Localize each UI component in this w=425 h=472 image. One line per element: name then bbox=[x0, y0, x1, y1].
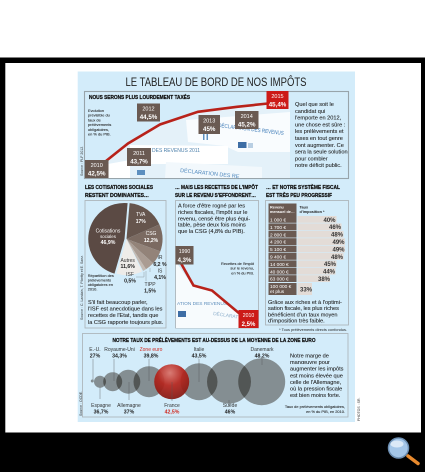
icon: magnifying glass bbox=[388, 438, 418, 464]
panel: pie chart: IS bbox=[158, 268, 163, 274]
row: 1 700 euros: 46% bbox=[329, 225, 342, 231]
text: pie caption: 2010. bbox=[88, 286, 97, 292]
row: 40 000 euros: 40 000 € bbox=[270, 269, 289, 275]
text: income tax paragraph: riches fiscales, l'impôt sur le bbox=[178, 210, 247, 216]
text: pie caption: Répartition des bbox=[88, 273, 114, 278]
data point: 2012: 2012 bbox=[142, 106, 155, 112]
pie labels: TVA bbox=[136, 212, 146, 218]
panel: euro zone bubble chart bbox=[82, 334, 348, 417]
leader lines bbox=[136, 263, 159, 281]
text: intro paragraph: taxes en tout genre bbox=[295, 136, 343, 142]
text: chart description: obligatoires, bbox=[88, 127, 109, 132]
data point: 1990: 1990 bbox=[179, 249, 190, 255]
panel: pie chart: 11,6% bbox=[120, 264, 135, 270]
row: 5 100 euros bbox=[268, 246, 345, 253]
country labels top: Zone euro bbox=[140, 347, 163, 353]
table header: d'imposition * bbox=[300, 210, 325, 214]
text: chart caption: Recettes de l'impôt bbox=[221, 261, 254, 266]
source label: Source : OCDE. bbox=[79, 391, 83, 416]
country labels bottom: 37% bbox=[124, 410, 135, 416]
row: 2 800 euros bbox=[268, 231, 344, 239]
pie labels: Cotisations bbox=[96, 228, 121, 234]
panel: pie chart: 0,5% bbox=[124, 278, 136, 284]
panel: pie chart: 4,1% bbox=[154, 275, 166, 281]
heading: cotisations sociales: RESTENT DOMINANTES… bbox=[85, 193, 149, 199]
row: 4 200 euros: 49% bbox=[332, 240, 345, 246]
text: margin paragraph: celle de l'Allemagne, bbox=[290, 380, 342, 386]
text: income tax paragraph: table, pèse deux fois moins bbox=[178, 223, 246, 229]
text: intro paragraph: l'emporte en 2012, bbox=[295, 116, 342, 122]
row: 40 000 euros: 44% bbox=[323, 270, 336, 276]
text: margin paragraph: est moins élevée que bbox=[290, 373, 343, 379]
pie labels: 17% bbox=[136, 219, 146, 225]
row: 40 000 euros bbox=[268, 268, 336, 276]
pie labels: sociales bbox=[100, 234, 117, 239]
row: 4 200 euros bbox=[268, 238, 345, 246]
text: chart description: prélèvements bbox=[88, 122, 111, 127]
row: 100 000 euros et plus: 100 000 € bbox=[270, 285, 291, 290]
heading: recettes de l'impôt: … MAIS LES RECETTES DE L'IMPÔT bbox=[175, 183, 259, 191]
data point: 2010: 42,5% bbox=[88, 170, 106, 178]
row: 1 000 euros bbox=[268, 216, 336, 224]
row: 63 000 euros: 63 000 € bbox=[270, 277, 289, 283]
text: intro paragraph: une chose est sûre : bbox=[295, 122, 346, 128]
text: chart caption: Taux de prélèvements obligatoires, bbox=[285, 404, 345, 409]
heading: nous serons plus lourdement taxés: NOUS SERONS PLUS LOURDEMENT TAXÉS bbox=[89, 93, 190, 101]
text: margin paragraph: où la pression fiscale bbox=[290, 386, 342, 392]
pie labels: CSG bbox=[146, 231, 157, 237]
text: intro paragraph: vont augmenter. Ce bbox=[295, 143, 344, 149]
source label: Source : C. Landais, T. Piketty et E. Saez. bbox=[80, 255, 84, 320]
panel: rising taxes line chart: DÉCLARATION DES REVENUS bbox=[218, 122, 284, 137]
panel: pie chart: Autres bbox=[120, 258, 135, 264]
red trend line bbox=[106, 104, 268, 161]
pie slice: CSG bbox=[126, 224, 162, 251]
panel: tax rate table bbox=[266, 200, 348, 325]
row: 9 400 euros: 48% bbox=[331, 255, 344, 261]
text: intro paragraph: notre déficit public. bbox=[295, 163, 342, 169]
row: 2 800 euros: 2 800 € bbox=[270, 232, 286, 238]
row: 14 000 euros: 45% bbox=[324, 262, 337, 268]
country labels bottom bbox=[91, 403, 237, 416]
country labels bottom: Suède bbox=[223, 403, 237, 409]
row: 1 700 euros bbox=[268, 223, 342, 231]
data point: 2011: 43,7% bbox=[130, 158, 148, 166]
panel: rising taxes line chart: DÉCLARATION DES RE bbox=[180, 167, 240, 180]
panel: income tax line chart bbox=[176, 200, 258, 328]
country labels top: 27% bbox=[90, 354, 101, 360]
text: ISF note: la CSG rapporte toujours plus. bbox=[88, 320, 164, 326]
table header: mensuel de… bbox=[270, 210, 295, 214]
bubble: France bbox=[154, 364, 189, 399]
data point: 2014 bbox=[235, 111, 258, 129]
pie slice: TVA bbox=[126, 203, 159, 239]
country labels bottom: 46% bbox=[225, 410, 236, 416]
country labels bottom: Espagne bbox=[91, 403, 111, 409]
text: chart description: prévisible du bbox=[88, 113, 110, 118]
data point: 2015: 2015 bbox=[271, 94, 284, 100]
text: intro paragraph: Quel que soit le bbox=[295, 102, 334, 108]
heading: zone euro comparison: NOTRE TAUX DE PRÉLÈVEMENTS EST AU-DESSUS DE LA MOYENNE DE LA ZONE EURO bbox=[112, 336, 316, 344]
text: chart caption: en % du PIB, en 2010. bbox=[306, 409, 345, 414]
row: 2 800 euros: 48% bbox=[331, 233, 344, 239]
table header: Taux bbox=[300, 206, 308, 210]
pie slice: IS bbox=[126, 239, 153, 269]
text: ISF note: S'il fait beaucoup parler, bbox=[88, 300, 148, 306]
text: pie caption: prélèvements bbox=[88, 278, 111, 282]
country labels top bbox=[89, 347, 274, 360]
panel: infographic background bbox=[78, 72, 355, 422]
data point: 2012: 44,5% bbox=[140, 114, 158, 121]
data point: 2010: 2,5% bbox=[242, 322, 256, 328]
panel: rising taxes line chart: DES REVENUS 2011 bbox=[152, 148, 200, 154]
panel: pie chart: TIPP bbox=[144, 282, 156, 288]
source label: Source : PLF 2012. bbox=[80, 146, 84, 176]
row: 100 000 euros et plus bbox=[268, 283, 313, 295]
country labels top: 39,8% bbox=[144, 354, 159, 360]
panel: income tax line chart: ATION DES REVENUS bbox=[177, 301, 227, 307]
text: margin paragraph: manœuvre pour bbox=[290, 360, 330, 366]
text: table note: d'imposition très faible. bbox=[268, 319, 325, 325]
row: 4 200 euros: 4 200 € bbox=[270, 240, 286, 246]
country labels top: 43,5% bbox=[192, 354, 207, 360]
data point: 2015: 45,4% bbox=[269, 102, 287, 108]
row: 63 000 euros: 38% bbox=[318, 277, 331, 283]
country labels top: Italie bbox=[194, 347, 204, 353]
row: 100 000 euros et plus: 33% bbox=[300, 288, 313, 294]
panel: pie chart: 1,5% bbox=[144, 288, 156, 294]
text: income tax paragraph: que la CSG (4,8% du PIB). bbox=[178, 229, 245, 235]
red falling line bbox=[178, 258, 240, 314]
data point: 2011 bbox=[127, 148, 151, 166]
row: 1 000 euros: 40% bbox=[323, 218, 336, 224]
row: 9 400 euros bbox=[268, 253, 344, 261]
text: intro paragraph: les prélèvements et bbox=[295, 129, 344, 135]
data point: 2010 bbox=[238, 310, 258, 328]
text: table note: sation fiscale, les plus riches bbox=[268, 306, 339, 312]
country labels bottom: 36,7% bbox=[94, 410, 109, 416]
data point: 2013: 45% bbox=[203, 126, 216, 133]
country labels bottom: 42,5% bbox=[165, 410, 180, 416]
table header bbox=[268, 204, 325, 216]
text: table note: Grâce aux riches et à l'optimi- bbox=[268, 300, 342, 306]
data point: 2010: 2010 bbox=[91, 163, 103, 169]
heading: système fiscal: … ET NOTRE SYSTÈME FISCAL bbox=[266, 183, 341, 191]
panel: rising taxes line chart bbox=[80, 91, 348, 180]
text: ISF note: recettes de l'Etat, tandis que bbox=[88, 313, 158, 319]
data point: 2014: 45,2% bbox=[238, 122, 256, 128]
text: pie caption: obligatoires en bbox=[88, 282, 113, 287]
pie slice: autres bbox=[116, 239, 142, 275]
heading: système fiscal: EST TRÈS PEU PROGRESSIF bbox=[266, 191, 333, 199]
row: 100 000 euros et plus: et plus bbox=[270, 289, 285, 295]
footnote: * Tous prélèvements directs confondus. bbox=[279, 327, 347, 332]
row: 9 400 euros: 9 400 € bbox=[270, 254, 286, 260]
leader lines bbox=[93, 358, 262, 405]
pie slice: cotisations sociales bbox=[88, 203, 128, 274]
text: table note: bénéficient d'un taux moyen bbox=[268, 312, 337, 318]
panel: pie chart: IR bbox=[158, 255, 163, 261]
text: margin paragraph: augmenter les impôts bbox=[290, 367, 344, 373]
country labels top: 34,3% bbox=[112, 354, 127, 360]
table header: Revenu bbox=[270, 206, 284, 210]
text: margin paragraph: est bien moins forte. bbox=[290, 393, 341, 399]
data point: 2012 bbox=[137, 104, 160, 122]
text: ISF note: l'ISF est anecdotique dans les bbox=[88, 307, 163, 313]
country labels bottom: Allemagne bbox=[117, 403, 141, 409]
country labels top: Danemark bbox=[250, 347, 274, 353]
title: LE TABLEAU DE BORD DE NOS IMPÔTS bbox=[126, 76, 307, 89]
country labels top: 48,2% bbox=[255, 354, 270, 360]
text: margin paragraph: Notre marge de bbox=[290, 354, 329, 360]
text: chart description: taux de bbox=[88, 117, 101, 122]
data point: 2013 bbox=[198, 115, 220, 134]
pie labels: 12,2% bbox=[144, 238, 159, 244]
row: 14 000 euros bbox=[268, 260, 337, 268]
panel: pie chart bbox=[85, 200, 167, 328]
data point: 2014: 2014 bbox=[241, 114, 253, 120]
text: income tax paragraph: revenu, censé être plus équi- bbox=[178, 216, 250, 222]
text: chart caption: sur le revenu, bbox=[230, 266, 254, 271]
row: 5 100 euros: 49% bbox=[332, 247, 345, 253]
data point: 2015 bbox=[266, 91, 288, 109]
panel: pie chart: 6,2 % bbox=[153, 262, 167, 268]
text: chart description: Evolution bbox=[88, 108, 104, 113]
country labels top: E.-U. bbox=[89, 347, 101, 353]
data point: 1990: 4,3% bbox=[178, 258, 192, 264]
text: chart description: en % du PIB. bbox=[88, 132, 111, 136]
row: 14 000 euros: 14 000 € bbox=[270, 262, 289, 268]
pie slice: TIPP bbox=[126, 239, 146, 271]
text: intro paragraph: sera la seule solution bbox=[295, 150, 348, 156]
text: intro paragraph: candidat qui bbox=[295, 109, 325, 115]
row: 63 000 euros bbox=[268, 275, 331, 283]
photo credit: PHOTOS : SR. bbox=[357, 398, 361, 421]
panel: income tax line chart: DÉCLARAT bbox=[213, 310, 239, 321]
pie labels bbox=[96, 212, 159, 246]
row: 1 700 euros: 1 700 € bbox=[270, 225, 286, 231]
data point: 2010 bbox=[85, 160, 108, 178]
pie labels: 46,9% bbox=[101, 240, 116, 246]
row: 5 100 euros: 5 100 € bbox=[270, 247, 286, 253]
row: 1 000 euros: 1 000 € bbox=[270, 218, 286, 224]
panel: pie chart: ISF bbox=[126, 272, 134, 278]
country labels top: Royaume-Uni bbox=[104, 347, 135, 353]
text: chart caption: en % du PIB. bbox=[231, 270, 254, 275]
pie slice: IR bbox=[126, 239, 160, 263]
heading: recettes de l'impôt: SUR LE REVENU S'EFFONDRENT… bbox=[175, 193, 256, 199]
data point: 2013: 2013 bbox=[203, 118, 215, 124]
heading: cotisations sociales: LES COTISATIONS SOCIALES bbox=[85, 185, 153, 191]
data point: 2010: 2010 bbox=[243, 313, 254, 319]
data point: 1990 bbox=[176, 246, 194, 264]
bubbles bbox=[91, 358, 285, 405]
data point: 2011: 2011 bbox=[133, 151, 145, 157]
country labels bottom: France bbox=[164, 403, 180, 409]
text: income tax paragraph: A force d'être rogné par les bbox=[178, 204, 245, 210]
text: intro paragraph: pour combler bbox=[295, 156, 328, 162]
